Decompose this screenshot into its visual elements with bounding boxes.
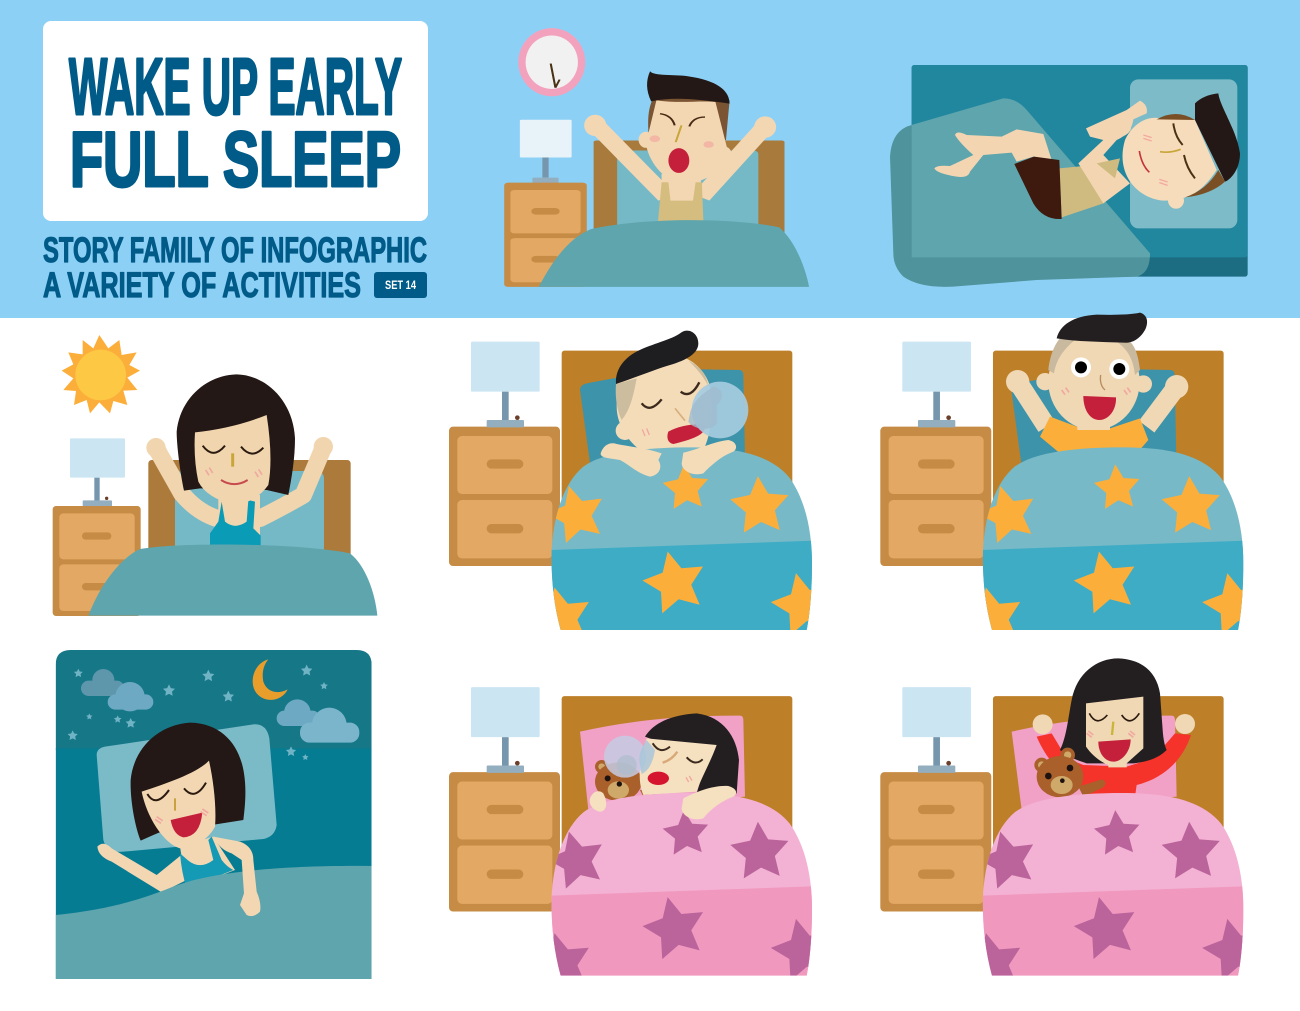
scene: man waking and stretching (504, 28, 809, 287)
bed background (56, 748, 372, 982)
woman (146, 374, 333, 546)
headboard and pillow (594, 140, 784, 241)
blanket (539, 220, 809, 287)
furniture (880, 687, 1224, 911)
mattress (912, 65, 1248, 277)
teddy bear (595, 760, 658, 801)
badge: set 14: SET 14 (385, 278, 416, 292)
scene: boy asleep and snoring (448, 330, 812, 630)
icon: crescent moon (253, 659, 288, 700)
pillow (1011, 369, 1176, 463)
blanket (552, 447, 812, 630)
icon: sun (62, 335, 140, 413)
header band (0, 0, 1300, 318)
badge: set 14 (374, 272, 427, 298)
girl (604, 713, 739, 795)
furniture (880, 342, 1224, 566)
furniture (449, 342, 792, 566)
subtitle text: A VARIETY OF ACTIVITIES (43, 266, 361, 305)
blanket (552, 793, 812, 976)
scene: girl asleep with teddy bear (448, 687, 812, 976)
sleeping man (934, 93, 1240, 219)
boy's head (616, 331, 748, 450)
boy's hands (601, 440, 736, 477)
clouds (81, 669, 359, 743)
pillow (580, 716, 745, 810)
night sky (56, 650, 372, 750)
title line: full sleep: FULL SLEEP (70, 115, 401, 203)
snot bubble (604, 736, 646, 778)
teddy bear (1034, 748, 1105, 797)
snot bubble (692, 382, 748, 438)
furniture (449, 687, 792, 911)
blanket (56, 866, 372, 979)
blanket (982, 447, 1244, 630)
girl's hands (590, 786, 736, 819)
subtitle text (43, 231, 427, 305)
headboard and pillow (148, 460, 351, 560)
blanket (982, 793, 1244, 976)
nightstand and lamp (53, 438, 141, 616)
scene: girl awake and stretching (880, 658, 1244, 976)
blanket (88, 544, 377, 616)
scene: woman waking with the sun (53, 335, 377, 616)
pillow (1012, 716, 1177, 810)
man (584, 71, 776, 224)
subtitle text: STORY FAMILY OF INFOGRAPHIC (43, 231, 427, 270)
title panel (43, 21, 428, 221)
scene: boy awake and cheering (880, 312, 1244, 630)
scene: woman sleeping at night (56, 650, 372, 982)
pillow (580, 369, 745, 463)
small stars (68, 665, 328, 760)
title line: wake up early: WAKE UP EARLY (69, 42, 402, 131)
pillow (97, 724, 277, 852)
nightstand and lamp (504, 120, 587, 287)
resting arm (213, 837, 260, 916)
girl (1033, 658, 1195, 797)
icon: wall clock (518, 28, 585, 96)
woman (97, 723, 245, 892)
boy (1006, 313, 1188, 453)
blanket (890, 98, 1150, 287)
pillow (1130, 79, 1237, 228)
scene: man asleep seen from above (890, 65, 1248, 287)
